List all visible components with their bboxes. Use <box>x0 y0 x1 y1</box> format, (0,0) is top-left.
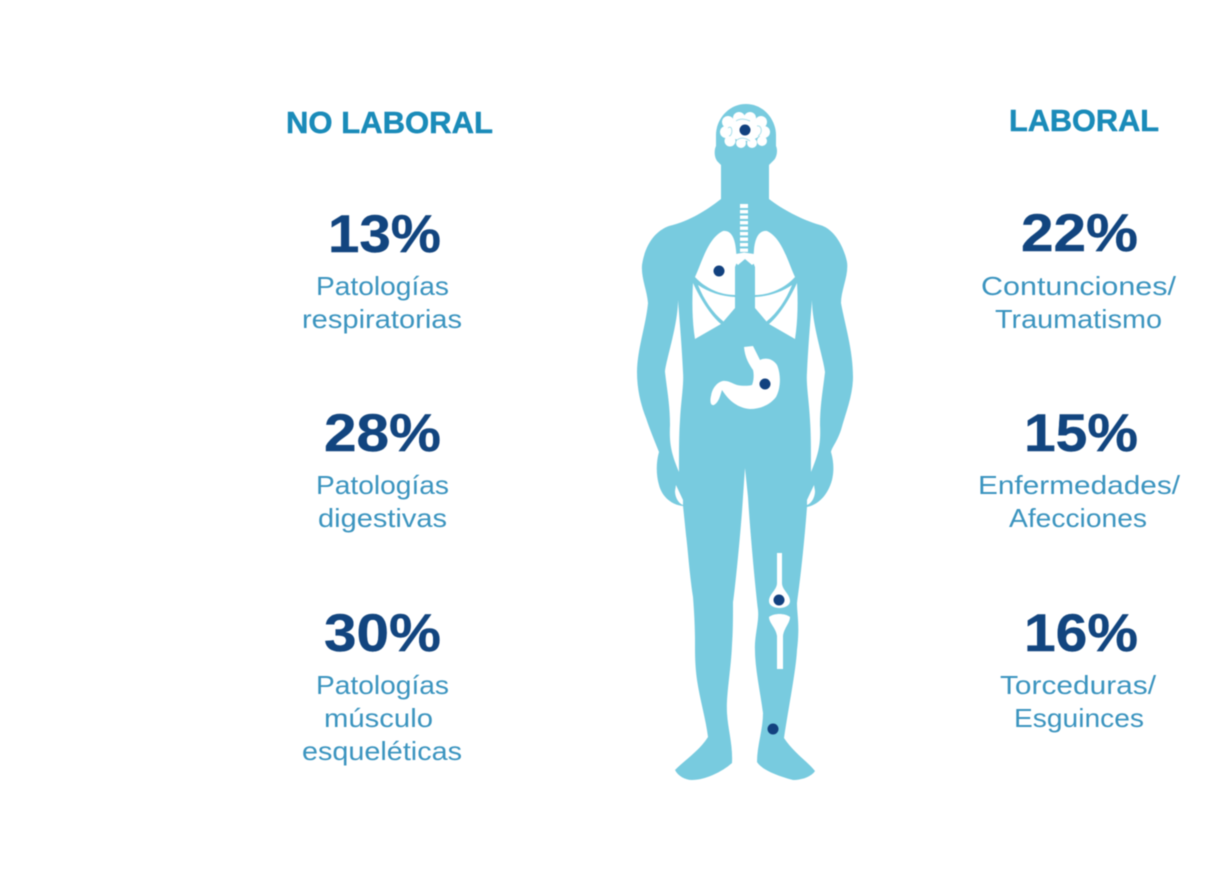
human body figure <box>637 104 853 780</box>
icon: lungs <box>692 231 798 339</box>
stat: 28% digestive: 28% <box>324 404 441 463</box>
stat: 28% digestive <box>316 404 449 533</box>
stat: 13% respiratory: Patologías <box>316 271 449 301</box>
stat: 13% respiratory <box>302 205 462 334</box>
stat: 15% illnesses: Afecciones <box>1009 503 1147 533</box>
icon: stomach <box>710 346 780 409</box>
gaps between arms and torso <box>665 300 683 472</box>
stat: 13% respiratory: respiratorias <box>302 304 462 334</box>
icon: knee bones <box>769 553 790 669</box>
stat: 22% contusions: 22% <box>1021 204 1138 263</box>
stat: 16% sprains: Torceduras/ <box>1000 670 1157 700</box>
stat: 30% musculoskeletal: músculo <box>324 703 433 733</box>
heading: laboral: LABORAL <box>1009 103 1159 138</box>
stat: 22% contusions: Traumatismo <box>995 304 1162 334</box>
stat: 30% musculoskeletal: Patologías <box>316 670 449 700</box>
stat: 30% musculoskeletal <box>302 604 462 766</box>
stat: 15% illnesses: 15% <box>1024 404 1138 463</box>
stat: 30% musculoskeletal: 30% <box>324 604 441 663</box>
stat: 28% digestive: digestivas <box>318 503 447 533</box>
stat: 30% musculoskeletal: esqueléticas <box>302 736 462 766</box>
icon: windpipe <box>735 204 756 265</box>
marker dots <box>714 124 784 734</box>
body silhouette <box>637 104 853 780</box>
stat: 16% sprains: 16% <box>1024 604 1138 663</box>
stat: 28% digestive: Patologías <box>316 470 449 500</box>
stat: 22% contusions <box>981 204 1177 334</box>
stat: 16% sprains: Esguinces <box>1014 703 1144 733</box>
gaps between hands and thighs <box>675 485 683 505</box>
stat: 15% illnesses: Enfermedades/ <box>978 470 1181 500</box>
stat: 16% sprains <box>1000 604 1157 733</box>
stat: 22% contusions: Contunciones/ <box>981 271 1177 301</box>
stat: 15% illnesses <box>978 404 1181 533</box>
icon: brain <box>720 112 770 148</box>
stat: 13% respiratory: 13% <box>328 205 441 264</box>
heading: no laboral: NO LABORAL <box>286 105 493 140</box>
